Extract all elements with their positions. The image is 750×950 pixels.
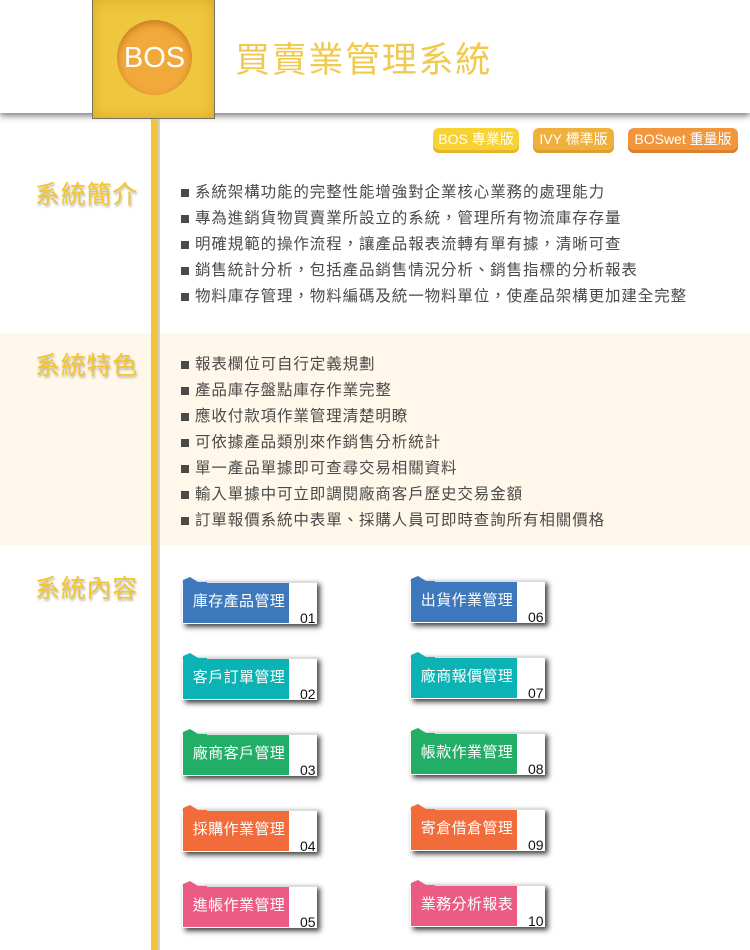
card 09 — [408, 804, 552, 858]
card 03: 03 — [300, 762, 316, 778]
card 01: 01 — [300, 610, 316, 626]
logo square — [92, 0, 215, 119]
card 08: 08 — [528, 761, 544, 777]
card 02 — [180, 653, 324, 708]
card 05: 05 — [300, 914, 316, 930]
badge: IVY 標準版 — [533, 128, 614, 153]
card 10: 業務分析報表 — [421, 896, 513, 913]
text list: features: 產品庫存盤點庫存作業完整 — [195, 382, 392, 399]
card 07: 廠商報價管理 — [421, 668, 513, 685]
badge: BOSwet 重量版 — [628, 128, 738, 153]
logo circle with BOS: BOS — [124, 42, 185, 74]
card 06: 出貨作業管理 — [421, 592, 513, 609]
card 06 — [408, 576, 552, 630]
text list: introduction: 系統架構功能的完整性能增強對企業核心業務的處理能力 — [195, 184, 605, 201]
logo circle with BOS — [117, 20, 192, 95]
text list: introduction: 專為進銷貨物買賣業所設立的系統，管理所有物流庫存存量 — [195, 210, 621, 227]
card 02: 02 — [300, 686, 316, 702]
heading: 系統簡介: 系統簡介 — [35, 181, 138, 209]
text list: features — [181, 356, 605, 529]
text list: features: 訂單報價系統中表單、採購人員可即時查詢所有相關價格 — [195, 512, 605, 529]
text list: features: 單一產品單據即可查尋交易相關資料 — [195, 460, 457, 477]
badge: BOS 專業版 — [433, 128, 519, 153]
text list: features: 輸入單據中可立即調閱廠商客戶歷史交易金額 — [195, 486, 523, 503]
badge: BOSwet 重量版: BOSwet 重量版 — [634, 131, 732, 147]
card 07 — [408, 652, 552, 706]
badge: BOS 專業版: BOS 專業版 — [438, 131, 514, 147]
text list: introduction: 物料庫存管理，物料編碼及統一物料單位，使產品架構更加建全完整 — [195, 288, 687, 305]
card 05 — [180, 881, 324, 936]
text list: introduction: 銷售統計分析，包括產品銷售情況分析、銷售指標的分析報表 — [195, 262, 638, 279]
text list: introduction: 明確規範的操作流程，讓產品報表流轉有單有據，清晰可查 — [195, 236, 621, 253]
card 02: 客戶訂單管理 — [193, 669, 285, 686]
card 06: 06 — [528, 609, 544, 625]
heading: 系統內容: 系統內容 — [35, 575, 138, 603]
text list: features: 報表欄位可自行定義規劃 — [195, 356, 375, 373]
card 10 — [408, 880, 552, 934]
text list: introduction — [181, 184, 687, 305]
card 09: 寄倉借倉管理 — [421, 820, 513, 837]
header bar — [0, 0, 750, 113]
heading: 系統特色: 系統特色 — [35, 352, 138, 380]
card 04: 採購作業管理 — [193, 821, 285, 838]
card 08: 帳款作業管理 — [421, 744, 513, 761]
card 09: 09 — [528, 837, 544, 853]
card 03 — [180, 729, 324, 784]
card 04: 04 — [300, 838, 316, 854]
card 07: 07 — [528, 685, 544, 701]
card 10: 10 — [528, 913, 544, 929]
text list: features: 可依據產品類別來作銷售分析統計 — [195, 434, 441, 451]
section band: features background — [0, 333, 750, 545]
card 05: 進帳作業管理 — [193, 897, 285, 914]
card 01: 庫存產品管理 — [193, 593, 285, 610]
title: 買賣業管理系統 — [235, 41, 492, 80]
card 08 — [408, 728, 552, 782]
badge: IVY 標準版: IVY 標準版 — [539, 131, 608, 147]
card 03: 廠商客戶管理 — [193, 745, 285, 762]
card 01 — [180, 577, 324, 632]
timeline vertical bar — [151, 118, 160, 950]
card 04 — [180, 805, 324, 860]
text list: features: 應收付款項作業管理清楚明瞭 — [195, 408, 408, 425]
